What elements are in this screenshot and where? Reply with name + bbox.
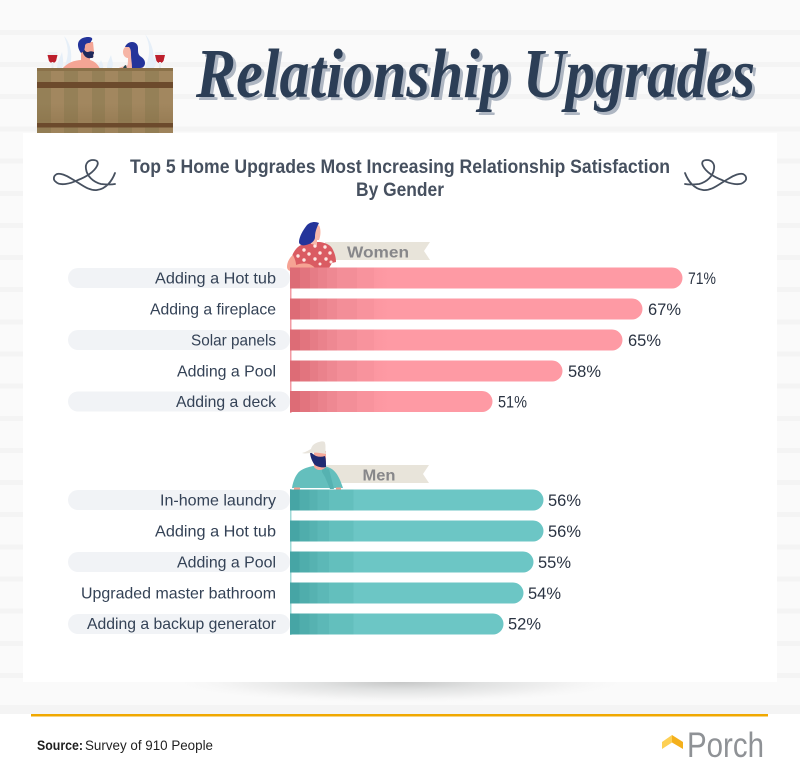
row: Adding a fireplace [150, 298, 681, 320]
title text: Relationship [195, 36, 510, 113]
icon: man with cap [292, 441, 343, 490]
row: Adding a Hot tub: Adding a Hot tub [155, 270, 276, 288]
row: Upgraded master bathroom: Upgraded master bathroom [81, 586, 276, 602]
row: Adding a Hot tub: 71% [688, 269, 716, 288]
icon: wooden tub [37, 68, 173, 133]
row: Solar panels [68, 330, 661, 350]
panel: women chart [68, 222, 716, 413]
icon: couple in hot tub [37, 34, 173, 133]
icon: steam [57, 34, 157, 68]
title text: Upgrades [523, 36, 755, 113]
row: Adding a Hot tub [155, 520, 581, 542]
icon: woman [117, 42, 146, 69]
axis line men [290, 489, 292, 635]
icon: man [62, 37, 100, 69]
row: Adding a Pool: Adding a Pool [177, 364, 276, 380]
men ribbon label: Men [362, 468, 396, 484]
row: Adding a deck [68, 391, 527, 412]
row: In-home laundry: In-home laundry [160, 492, 276, 510]
row: Adding a deck: 51% [498, 392, 527, 412]
icon: wine glass left [48, 52, 58, 68]
row: Adding a fireplace: Adding a fireplace [150, 302, 276, 318]
row: Adding a Pool: 55% [538, 553, 571, 572]
row: Solar panels: Solar panels [191, 332, 276, 350]
row: Upgraded master bathroom: 54% [528, 584, 561, 603]
panel: men chart [68, 441, 581, 635]
row: Solar panels: 65% [628, 331, 661, 350]
icon: woman leaning [287, 222, 336, 273]
row: Adding a Hot tub [68, 268, 716, 288]
icon: right flourish [685, 160, 746, 190]
icon: left flourish [54, 160, 115, 190]
row: Adding a Hot tub: Adding a Hot tub [155, 524, 276, 540]
title shadow: Upgrades [526, 39, 758, 116]
row: In-home laundry: 56% [548, 491, 581, 510]
row: Adding a deck: Adding a deck [176, 394, 277, 411]
row: Upgraded master bathroom [81, 582, 561, 604]
drop shadow under panel [165, 660, 635, 704]
title shadow: Relationship [198, 39, 513, 116]
title text [195, 36, 755, 113]
row: Adding a backup generator: Adding a backup generator [87, 616, 277, 633]
title [195, 36, 758, 116]
row: Adding a fireplace: 67% [648, 300, 681, 319]
row: Adding a Pool: 58% [568, 362, 601, 381]
title shadow [198, 39, 758, 116]
row: Adding a Pool [68, 552, 571, 572]
row: In-home laundry [68, 490, 581, 510]
axis line women [290, 267, 292, 413]
icon: Porch logo: Porch [687, 726, 764, 765]
main white panel [23, 133, 777, 682]
row: Adding a backup generator [68, 614, 541, 634]
subtitle [130, 157, 670, 201]
row: Adding a Pool [177, 360, 601, 382]
men ribbon label [325, 465, 429, 484]
row: Adding a Pool: Adding a Pool [177, 554, 276, 572]
icon: wine glass right [155, 52, 165, 68]
women ribbon label: Women [347, 244, 409, 262]
footer [0, 714, 800, 774]
subtitle: Top 5 Home Upgrades Most Increasing Relationship Satisfaction [130, 157, 670, 178]
subtitle: By Gender [356, 180, 445, 201]
women ribbon label [325, 242, 430, 262]
row: Adding a backup generator: 52% [508, 614, 541, 634]
icon: Porch logo [662, 726, 764, 765]
row: Adding a Hot tub: 56% [548, 522, 581, 541]
source note: Source:Survey of 910 People [37, 737, 213, 753]
